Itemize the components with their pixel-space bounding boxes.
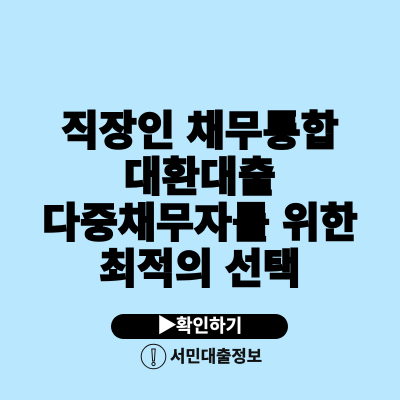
icon: exclamation circle (140, 344, 166, 370)
title line 4: 최적의 선택 (99, 246, 301, 292)
button: confirm (111, 314, 288, 339)
brand name: 서민대출정보 (170, 347, 262, 366)
title line 1: 직장인 채무통합 (61, 108, 339, 154)
title line 3: 다중채무자를 위한 (42, 200, 358, 246)
button label: ▶확인하기 (157, 315, 242, 337)
brand row (140, 344, 262, 370)
title line 2: 대환대출 (124, 154, 276, 200)
title (42, 108, 358, 292)
